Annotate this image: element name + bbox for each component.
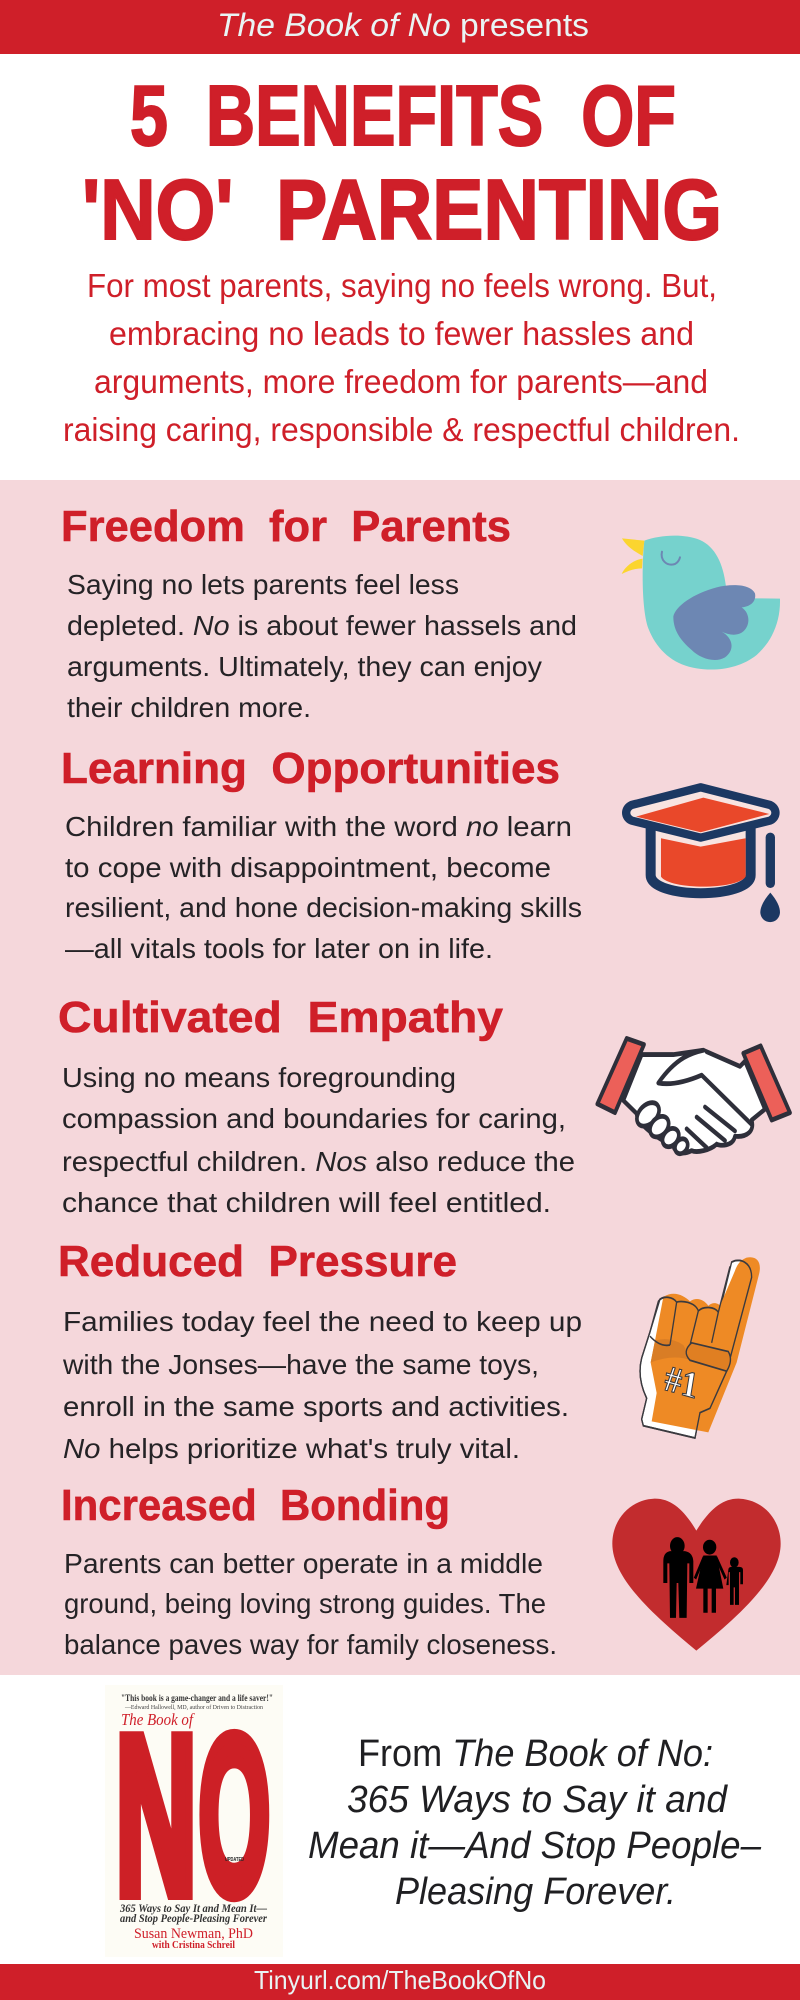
benefit 5: increased bonding: Parents can better operate in a middle <box>64 1548 543 1579</box>
book cover: UPDATED <box>225 1857 244 1863</box>
book cover <box>105 1685 283 1957</box>
benefit 1: freedom for parents: arguments. Ultimately, they can enjoy <box>67 651 542 682</box>
benefit 2: learning opportunities <box>61 744 582 964</box>
intro text: arguments, more freedom for parents—and <box>94 363 708 400</box>
icon: foam finger <box>640 1257 760 1438</box>
book cover: with Cristina Schreil <box>152 1940 235 1951</box>
intro text <box>63 267 740 448</box>
benefit 4: reduced pressure: No helps prioritize what's truly vital. <box>63 1433 520 1464</box>
benefit 2: learning opportunities: resilient, and hone decision-making skills <box>65 892 582 923</box>
book source text: From The Book of No: <box>358 1733 713 1775</box>
panel: benefits background <box>0 480 800 1675</box>
benefit 4: reduced pressure: Reduced Pressure <box>58 1237 457 1286</box>
benefit 4: reduced pressure <box>58 1237 582 1464</box>
icon: foam finger: #1 <box>662 1358 701 1407</box>
bottom banner <box>0 1964 800 2000</box>
benefit 4: reduced pressure: Families today feel the need to keep up <box>63 1306 582 1337</box>
intro text: For most parents, saying no feels wrong. But, <box>87 267 717 304</box>
title <box>82 69 722 258</box>
benefit 3: cultivated empathy: Using no means foregrounding <box>62 1062 456 1093</box>
benefit 4: reduced pressure: enroll in the same sports and activities. <box>63 1391 569 1422</box>
benefit 4: reduced pressure: with the Jonses—have the same toys, <box>62 1349 539 1380</box>
icon: graduation cap <box>626 787 780 922</box>
title: 5 BENEFITS OF <box>130 69 676 164</box>
benefit 2: learning opportunities: —all vitals tools for later on in life. <box>65 933 493 964</box>
benefit 3: cultivated empathy <box>58 993 575 1218</box>
benefit 2: learning opportunities: Learning Opportunities <box>61 744 560 793</box>
benefit 1: freedom for parents: Saying no lets parents feel less <box>67 569 459 600</box>
icon: family in heart <box>612 1499 781 1651</box>
bottom banner: Tinyurl.com/TheBookOfNo <box>254 1965 546 1995</box>
benefit 1: freedom for parents: Freedom for Parents <box>61 502 511 551</box>
book cover: The Book of <box>121 1710 195 1729</box>
book cover: O <box>198 1690 270 1941</box>
benefit 1: freedom for parents: depleted. No is about fewer hassels and <box>67 610 577 641</box>
book cover: N <box>116 1689 197 1941</box>
benefit 2: learning opportunities: Children familiar with the word no learn <box>65 811 572 842</box>
intro text: raising caring, responsible & respectful children. <box>63 411 740 448</box>
book cover: "This book is a game-changer and a life saver!" <box>121 1693 273 1703</box>
benefit 2: learning opportunities: to cope with disappointment, become <box>65 852 551 883</box>
benefit 3: cultivated empathy: respectful children. Nos also reduce the <box>62 1146 575 1177</box>
book cover: —Edward Hallowell, MD, author of Driven to Distraction <box>124 1704 264 1711</box>
book source text: Mean it—And Stop People– <box>308 1825 762 1867</box>
benefit 3: cultivated empathy: compassion and boundaries for caring, <box>62 1103 566 1134</box>
benefit 5: increased bonding: balance paves way for family closeness. <box>64 1629 557 1660</box>
icon: bird <box>622 536 780 670</box>
book cover: Susan Newman, PhD <box>134 1926 253 1942</box>
book cover: and Stop People-Pleasing Forever <box>120 1913 267 1925</box>
intro text: embracing no leads to fewer hassles and <box>109 315 694 352</box>
book source text: 365 Ways to Say it and <box>347 1779 729 1821</box>
top banner: The Book of No presents <box>217 7 589 43</box>
book source text <box>308 1733 762 1913</box>
benefit 5: increased bonding <box>61 1481 557 1660</box>
icon: handshake <box>597 1038 790 1157</box>
benefit 5: increased bonding: Increased Bonding <box>61 1481 450 1530</box>
benefit 5: increased bonding: ground, being loving strong guides. The <box>64 1588 546 1619</box>
top banner <box>0 0 800 54</box>
benefit 1: freedom for parents: their children more. <box>67 692 311 723</box>
benefit 3: cultivated empathy: Cultivated Empathy <box>58 993 504 1042</box>
book cover: 365 Ways to Say It and Mean It— <box>119 1903 267 1915</box>
benefit 1: freedom for parents <box>61 502 577 723</box>
book source text: Pleasing Forever. <box>395 1871 676 1913</box>
title: 'NO' PARENTING <box>82 163 722 258</box>
benefit 3: cultivated empathy: chance that children will feel entitled. <box>62 1187 551 1218</box>
